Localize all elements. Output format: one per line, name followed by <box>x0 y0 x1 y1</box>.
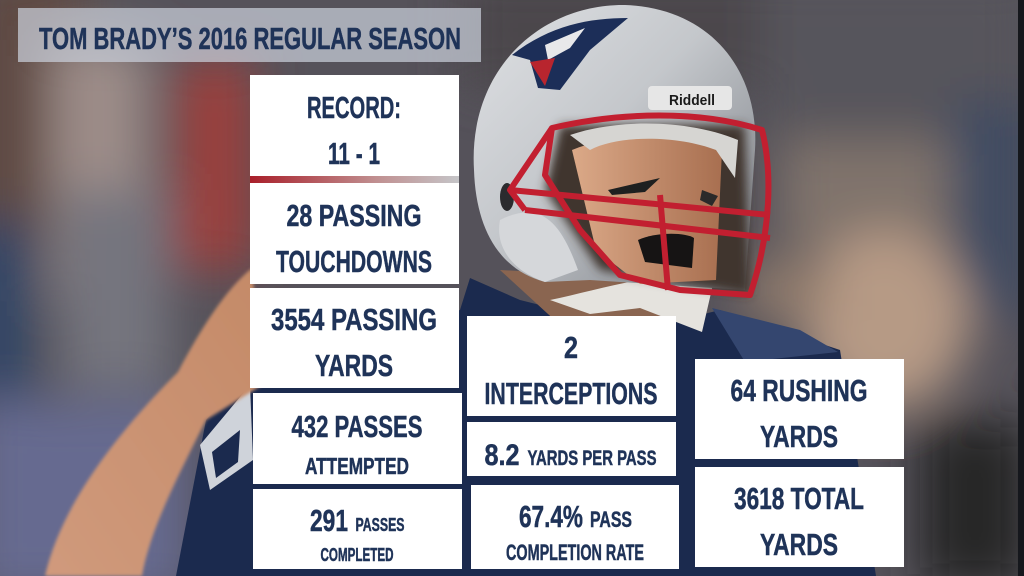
stat card: record: RECORD: <box>307 90 401 125</box>
stat card: record <box>250 75 459 176</box>
stat card: passing yards <box>250 288 459 388</box>
stat card: yards per pass: YARDS PER PASS <box>528 447 656 470</box>
stat card: rushing yards: YARDS <box>760 419 838 454</box>
stat card: completion rate: 67.4% <box>519 499 583 534</box>
stat card: completion rate: PASS <box>590 507 632 532</box>
helmet logo <box>512 18 628 90</box>
decorative strip <box>250 176 459 183</box>
stat card: record: 11 - 1 <box>328 136 380 171</box>
title banner <box>18 8 481 62</box>
stat card: passing touchdowns <box>250 183 459 284</box>
helmet side cheek <box>499 212 578 282</box>
stat card: rushing yards: 64 RUSHING <box>730 373 868 408</box>
stat card: passes completed: COMPLETED <box>320 545 394 565</box>
stat card: passes completed: PASSES <box>356 515 404 535</box>
stat card: total yards: 3618 TOTAL <box>734 481 864 516</box>
stat card: interceptions <box>467 316 676 416</box>
jersey <box>176 278 876 576</box>
helmet shell <box>474 5 755 290</box>
stat card: passing yards: YARDS <box>315 348 393 383</box>
face <box>572 137 722 284</box>
stat card: interceptions: INTERCEPTIONS <box>484 376 658 411</box>
helmet ear hole <box>500 183 514 211</box>
stat card: completion rate: COMPLETION RATE <box>506 540 644 565</box>
strip at right edge <box>1018 0 1024 576</box>
stat card: yards per pass <box>467 422 676 476</box>
title banner: TOM BRADY’S 2016 REGULAR SEASON <box>39 21 461 56</box>
stat card: passes attempted: 432 PASSES <box>292 409 422 444</box>
stat card: passing touchdowns: 28 PASSING <box>286 198 422 233</box>
neck <box>500 270 690 325</box>
icon: shoulder logo <box>200 385 253 490</box>
stat card: total yards <box>695 467 904 567</box>
arm <box>45 268 262 576</box>
forehead pad <box>570 124 738 178</box>
stat card: passes attempted: ATTEMPTED <box>305 453 409 479</box>
stat card: passes completed: 291 <box>310 503 348 538</box>
stat card: interceptions: 2 <box>564 330 578 365</box>
stat card: passes completed <box>253 489 462 569</box>
stat card: passing yards: 3554 PASSING <box>271 302 437 337</box>
stat card: rushing yards <box>695 359 904 459</box>
facemask <box>510 116 770 295</box>
stat card: passes attempted <box>253 393 462 484</box>
stat card: yards per pass: 8.2 <box>484 439 520 472</box>
icon: Riddell label: Riddell <box>669 92 715 109</box>
helmet interior shadow <box>545 125 750 295</box>
icon: Riddell label <box>648 86 732 110</box>
stat card: passing touchdowns: TOUCHDOWNS <box>276 244 432 279</box>
stat card: total yards: YARDS <box>760 527 838 562</box>
stat card: completion rate <box>471 485 679 569</box>
